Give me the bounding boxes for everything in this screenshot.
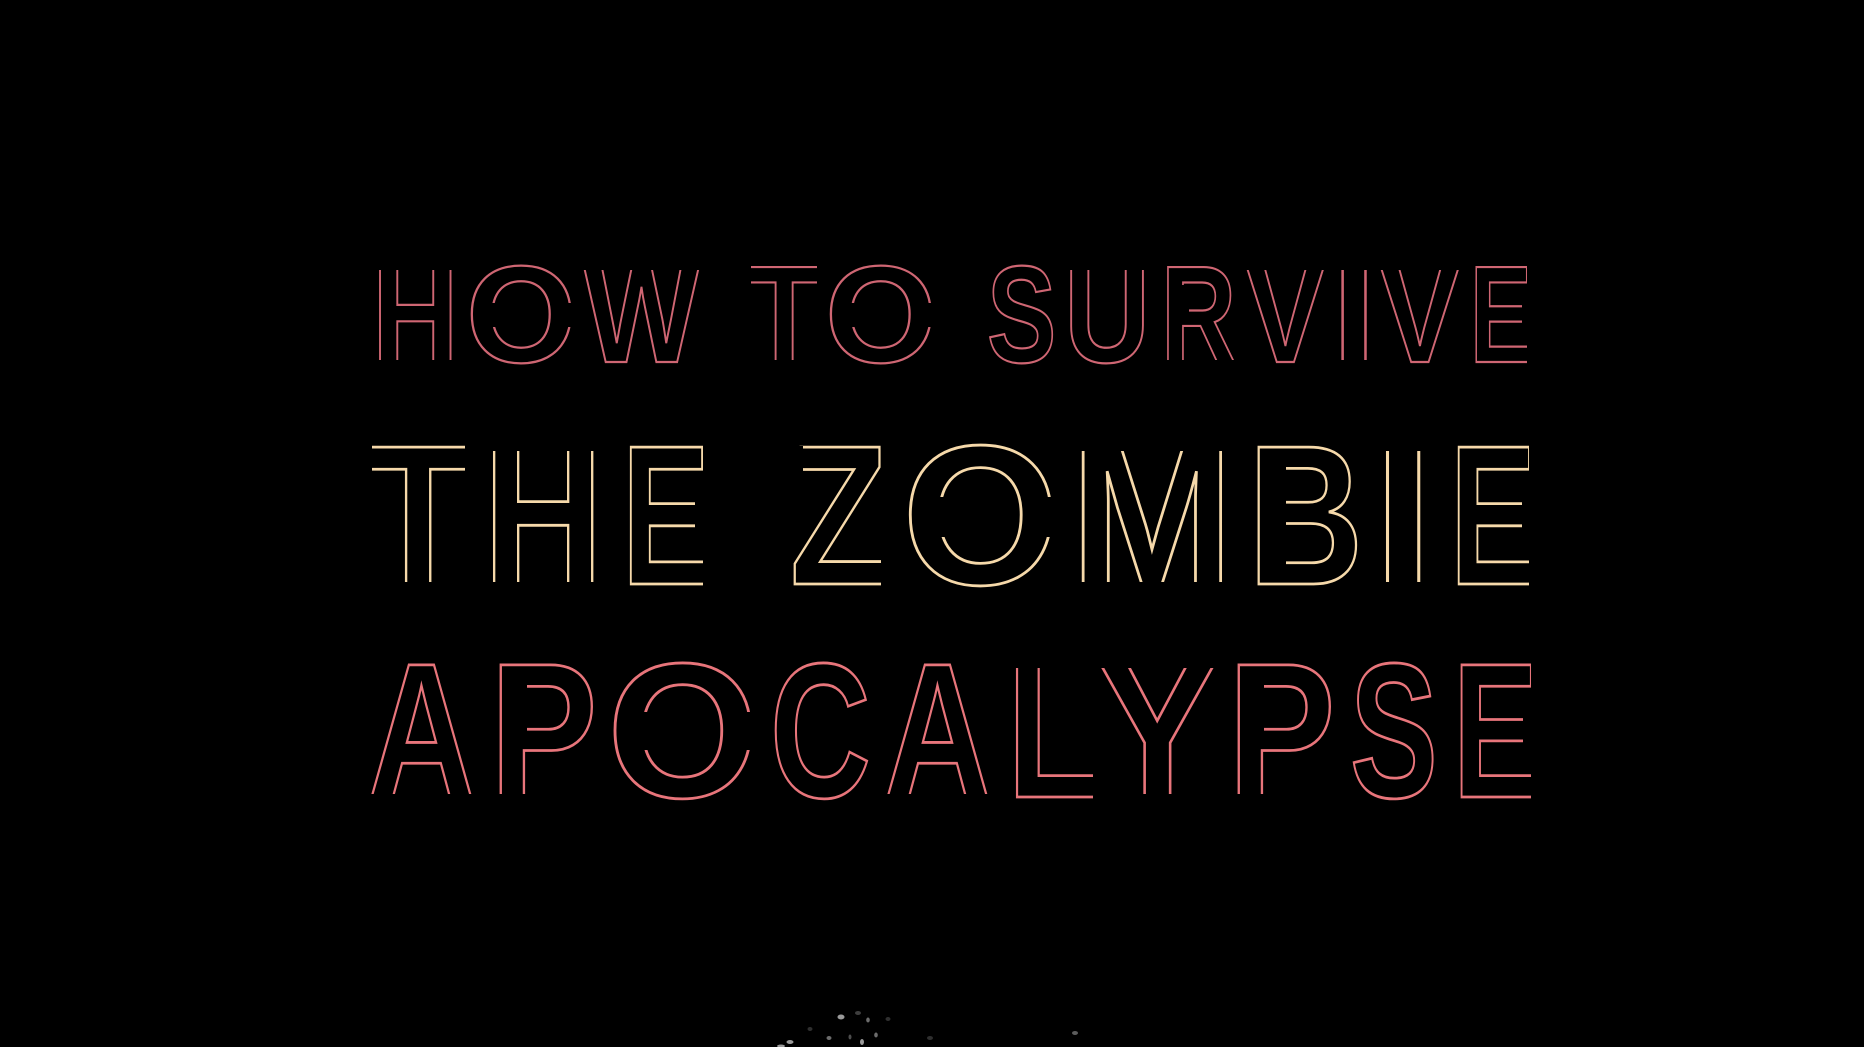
speckled image fragment at bottom edge — [777, 1011, 1078, 1047]
title line: The zombie — [372, 444, 1529, 588]
title line: How to survive — [379, 264, 1527, 364]
title line: Apocalypse — [371, 662, 1531, 800]
